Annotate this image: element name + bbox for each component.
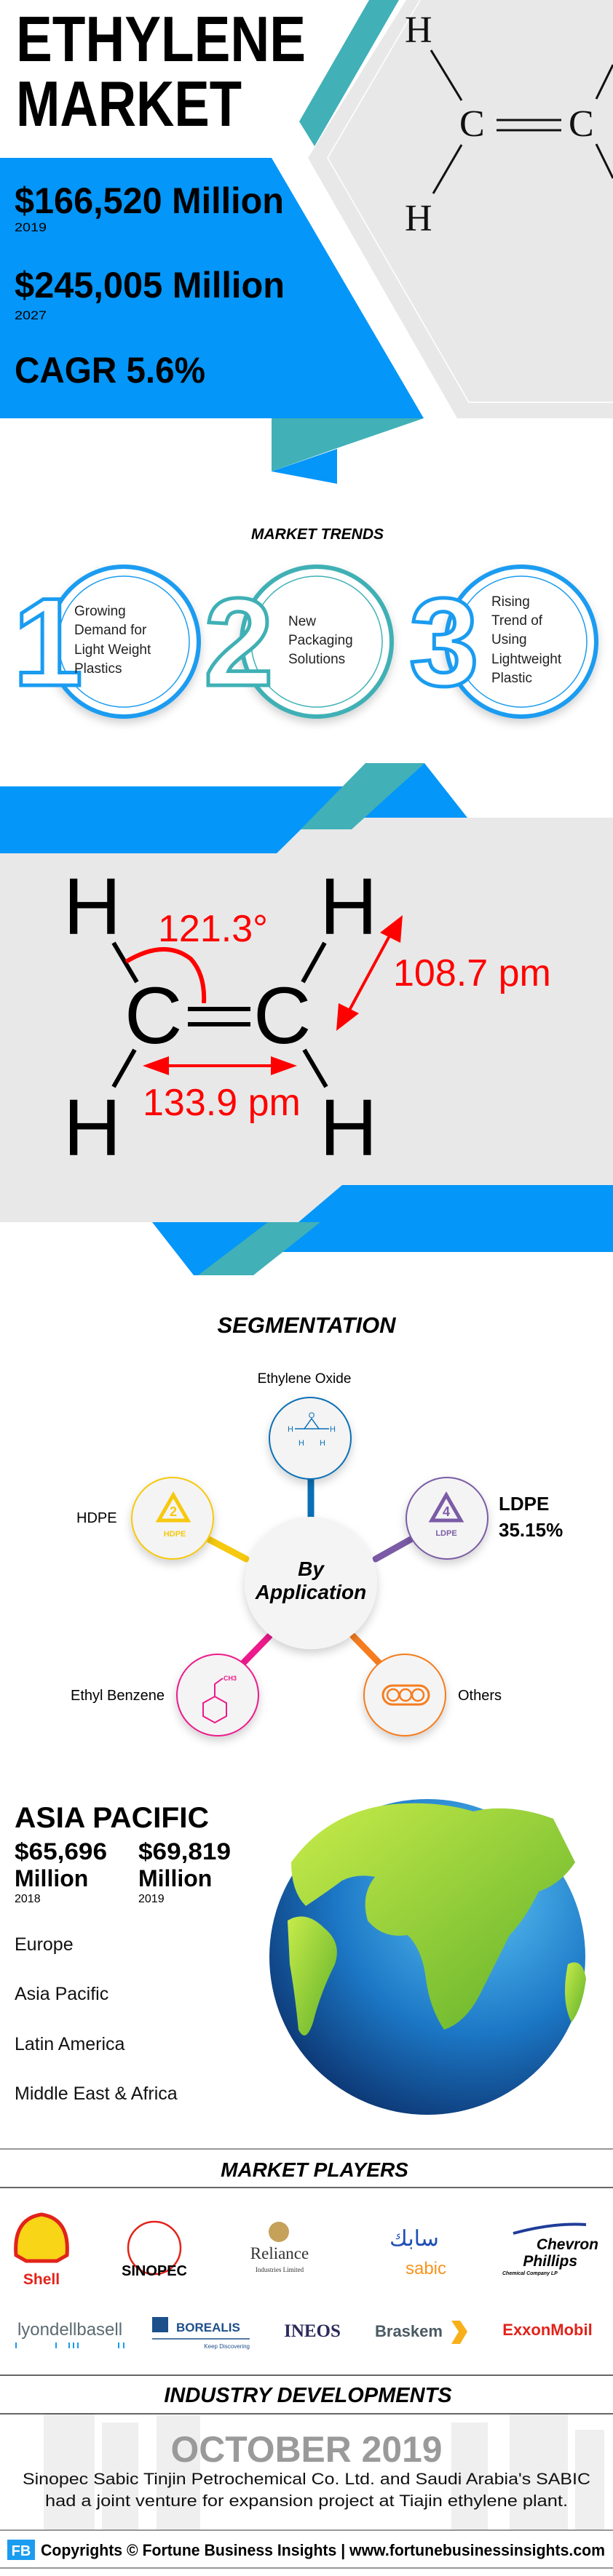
logo: Chevron Phillips: Chevron: [537, 2236, 598, 2253]
node: ethyl benzene: CH3: [224, 1675, 237, 1682]
panel: asia pacific stats: $65,696: [15, 1838, 107, 1865]
panel: trend 1: Light Weight: [74, 642, 151, 658]
node: LDPE: LDPE: [499, 1493, 549, 1515]
panel: asia pacific stats: ASIA PACIFIC: [15, 1802, 209, 1834]
diagram: ethylene bond lengths and angle: H: [320, 1083, 377, 1173]
diagram: ethylene bond lengths and angle: H: [320, 862, 377, 952]
logo: SABIC: sabic: [406, 2259, 446, 2278]
logo: ExxonMobil: ExxonMobil: [502, 2321, 593, 2339]
text block: development: [23, 2429, 590, 2510]
panel: market size: CAGR 5.6%: [15, 350, 205, 391]
logo: Chevron Phillips: Chemical Company LP: [502, 2271, 558, 2276]
node: ethylene oxide: H: [320, 1439, 325, 1448]
illustration: ethylene structural formula (serif): C: [459, 103, 485, 145]
panel: asia pacific stats: 2018: [15, 1893, 41, 1905]
footer: Copyrights © Fortune Business Insights | www.fortunebusinessinsights.com: [41, 2541, 605, 2559]
panel: trend 2: [204, 567, 392, 717]
panel: trend 2: Packaging: [288, 633, 353, 648]
node: others: Others: [458, 1688, 502, 1704]
node: ethylene oxide: Ethylene Oxide: [258, 1371, 351, 1387]
logo: Borealis: [152, 2317, 250, 2350]
node: LDPE: 35.15%: [499, 1519, 563, 1541]
panel: market size: 2027: [15, 308, 47, 322]
panel: trend 3: 3: [409, 573, 479, 712]
node: others: [364, 1654, 502, 1736]
logo: Borealis: BOREALIS: [176, 2321, 240, 2334]
center circle: Application: [255, 1581, 366, 1603]
footer: FB: [12, 2543, 31, 2559]
node: ethylene oxide: H: [330, 1425, 336, 1434]
logo: Shell: Shell: [23, 2271, 60, 2288]
panel: market size: 2019: [15, 220, 47, 234]
list: regions: Latin America: [15, 2034, 125, 2054]
panel: trend 1: 1: [13, 573, 83, 712]
logo: Reliance: Industries Limited: [256, 2266, 304, 2273]
text block: development: had a joint venture for expansion project at Tiajin ethylene plant.: [45, 2492, 568, 2510]
diagram: ethylene bond lengths and angle: H: [63, 862, 121, 952]
panel: market size: $166,520 Million: [15, 180, 284, 221]
chart: segmentation by application: [71, 1371, 563, 1736]
list: regions: [15, 1934, 178, 2104]
logo: Sinopec: [122, 2222, 187, 2279]
illustration: ethylene structural formula (serif): C: [569, 103, 594, 145]
diagram: ethylene bond lengths and angle: H: [63, 1083, 121, 1173]
panel: trend 3: Lightweight: [491, 652, 562, 667]
band with molecule geometry: [0, 763, 613, 1275]
panel: market size: [0, 158, 424, 484]
panel: asia pacific stats: Million: [15, 1865, 88, 1891]
title: ETHYLENE: [16, 3, 306, 75]
node: HDPE: HDPE: [164, 1530, 186, 1539]
panel: trend 2: 2: [204, 573, 274, 712]
background: buildings: [44, 2401, 604, 2530]
logo: Chevron Phillips: Phillips: [523, 2253, 577, 2270]
list: regions: Asia Pacific: [15, 1984, 108, 2004]
logo: SABIC: سابك: [389, 2227, 439, 2251]
panel: trend 3: [409, 567, 596, 717]
logo: Chevron Phillips: [502, 2225, 598, 2276]
illustration: ethylene structural formula (serif): H: [405, 9, 432, 51]
footer: [0, 2530, 613, 2568]
panel: trend 1: Plastics: [74, 661, 122, 677]
node: HDPE: 2: [170, 1504, 177, 1519]
logo: SABIC: [389, 2227, 446, 2278]
panel: asia pacific stats: 2019: [138, 1893, 165, 1905]
logo: LyondellBasell: lyondellbasell: [17, 2320, 122, 2340]
node: LDPE: 4: [443, 1504, 450, 1519]
node: ethyl benzene: [71, 1654, 258, 1736]
panel: asia pacific stats: $69,819: [138, 1838, 231, 1865]
node: LDPE: [406, 1478, 563, 1559]
title: [16, 3, 306, 140]
node: ethylene oxide: H: [288, 1425, 293, 1434]
logos: market players: [16, 2214, 598, 2350]
diagram: ethylene bond lengths and angle: 108.7 pm: [393, 952, 551, 994]
list: regions: Europe: [15, 1934, 74, 1955]
diagram: ethylene bond lengths and angle: C: [124, 971, 182, 1061]
header background shapes: [299, 0, 613, 418]
illustration: ethylene structural formula (serif): [405, 9, 613, 239]
list: regions: Middle East & Africa: [15, 2083, 178, 2104]
logo: Sinopec: SINOPEC: [122, 2263, 187, 2279]
logo: Braskem: Braskem: [375, 2322, 443, 2340]
panel: market size: $245,005 Million: [15, 265, 285, 306]
panel: trend 3: Using: [491, 632, 527, 647]
text block: development: Sinopec Sabic Tinjin Petrochemical Co. Ltd. and Saudi Arabia's SABIC: [23, 2470, 590, 2488]
title: MARKET: [16, 68, 242, 140]
panel: trend 3: Trend of: [491, 613, 543, 629]
node: LDPE: LDPE: [435, 1529, 457, 1538]
diagram: ethylene bond lengths and angle: 121.3°: [158, 908, 268, 950]
panel: trend 2: Solutions: [288, 652, 345, 667]
center circle: [245, 1517, 377, 1649]
diagram: ethylene bond lengths and angle: C: [253, 971, 311, 1061]
heading: industry developments: INDUSTRY DEVELOPMENTS: [164, 2384, 452, 2407]
heading: market trends: MARKET TRENDS: [251, 526, 384, 543]
heading: market players: MARKET PLAYERS: [221, 2158, 408, 2181]
panel: trend 1: Demand for: [74, 623, 147, 638]
panel: trend 1: [13, 567, 199, 717]
panel: trend 2: New: [288, 614, 316, 629]
panel: trend 3: Rising: [491, 594, 530, 610]
diagram: ethylene bond lengths and angle: 133.9 pm: [143, 1082, 301, 1124]
logo: Borealis: Keep Discovering: [204, 2343, 250, 2350]
illustration: ethylene structural formula (serif): H: [405, 198, 432, 239]
panel: asia pacific stats: Million: [138, 1865, 212, 1891]
panel: trend 3: Plastic: [491, 671, 532, 686]
logo: Braskem: [375, 2321, 467, 2344]
node: ethyl benzene: Ethyl Benzene: [71, 1688, 165, 1704]
node: ethylene oxide: O: [309, 1411, 315, 1420]
logo: Reliance: [250, 2222, 309, 2273]
panel: asia pacific stats: [15, 1802, 231, 1905]
illustration: globe: [269, 1799, 586, 2115]
node: HDPE: HDPE: [76, 1510, 117, 1526]
diagram: ethylene bond lengths and angle: [63, 862, 551, 1173]
heading: segmentation: SEGMENTATION: [217, 1312, 396, 1338]
heading: industry developments: [0, 2375, 613, 2414]
panel: trend 1: Growing: [74, 604, 126, 619]
logo: INEOS: INEOS: [284, 2321, 341, 2341]
node: HDPE: [76, 1478, 213, 1559]
node: ethylene oxide: [258, 1371, 351, 1479]
logo: Shell: [16, 2214, 67, 2288]
node: ethylene oxide: H: [298, 1439, 304, 1448]
logo: Reliance: Reliance: [250, 2244, 309, 2262]
center circle: By: [298, 1558, 325, 1580]
text block: development: OCTOBER 2019: [170, 2429, 443, 2470]
